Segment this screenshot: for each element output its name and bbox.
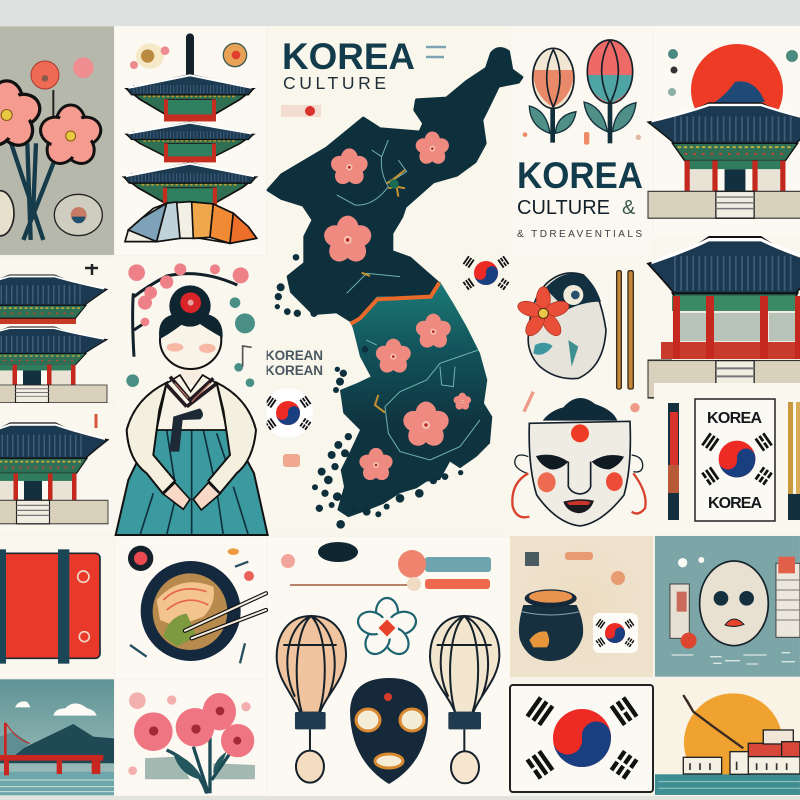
upper tier: [0, 275, 107, 324]
mask with flower: [516, 273, 606, 379]
branch: [683, 695, 743, 748]
lantern right: [430, 616, 499, 783]
spire: [178, 37, 202, 74]
south of peninsula: [337, 282, 492, 517]
panel: Korea card: [654, 383, 800, 535]
stems and leaves: [167, 737, 230, 793]
heading: Korea Culture: CULTURE: [517, 197, 610, 219]
label: Korean: [265, 348, 323, 378]
heading: Korea Culture: &: [622, 197, 636, 219]
panel: red suitcase: [0, 537, 114, 678]
faded red notes: [565, 552, 625, 585]
brush line: [290, 584, 420, 586]
left sleeve: [127, 383, 175, 493]
chopsticks: [617, 271, 633, 389]
blue scribble: [426, 47, 446, 57]
buildings: [670, 557, 800, 638]
tulip right: [584, 40, 636, 143]
panel: masks and chopsticks: [510, 255, 653, 536]
top strip: [0, 0, 800, 26]
coral marks: [523, 132, 641, 145]
pagoda tier 2: [127, 122, 253, 162]
red railing: [661, 342, 800, 359]
card flag: [701, 433, 773, 485]
panel: pavilion lower left: [0, 403, 114, 535]
panel: two-tier pavilion top left: [0, 257, 114, 403]
bowl: [141, 561, 241, 661]
lantern left: [277, 616, 346, 783]
islands: [275, 254, 463, 529]
pink ball: [73, 57, 94, 78]
hair flower: [180, 292, 201, 313]
small red mark: [94, 414, 98, 428]
brush upper: [398, 550, 491, 578]
chopsticks left: [668, 403, 679, 520]
black mask: [350, 678, 428, 784]
white marks: [678, 557, 704, 567]
badges: [78, 571, 89, 642]
panel: pavilion mid right: [648, 236, 800, 398]
small pink note: [283, 454, 300, 467]
tulip left: [529, 48, 576, 143]
pagoda tier 3: [124, 163, 256, 210]
rivers and roads: [337, 140, 480, 460]
water dashes: [672, 653, 795, 664]
panel: pink flowers: [115, 679, 267, 795]
panel: bowl of food: [115, 537, 267, 678]
pagoda tier 1: [127, 75, 253, 121]
card: [695, 399, 775, 521]
red columns: [673, 296, 800, 359]
heading: Korea Culture: & TDREAVENTIALS: [517, 229, 642, 240]
neck: [181, 368, 201, 385]
fan: [125, 202, 257, 243]
heading: Korea Culture: [517, 155, 643, 240]
jacket torso: [157, 375, 227, 430]
panel: tulips and heading: [511, 26, 653, 255]
pink mark: [281, 554, 295, 568]
rocks: [145, 757, 255, 779]
houses: [683, 730, 800, 774]
panel: pagoda: [115, 26, 266, 255]
head: [160, 311, 221, 369]
flag sticker left of map: [263, 388, 313, 438]
label: Korean: KOREAN: [265, 363, 323, 378]
clouds: [15, 701, 97, 716]
subtitle: CULTURE: [283, 73, 386, 93]
panel: lanterns and black mask: [268, 537, 510, 796]
hair: [160, 314, 222, 338]
collar: [166, 377, 216, 407]
water: [655, 774, 800, 795]
map of Korea: [268, 49, 522, 529]
panel: jar: [510, 536, 653, 677]
chopsticks right: [788, 402, 800, 520]
round ornament: [54, 194, 102, 236]
small icons: [128, 546, 254, 663]
right sleeve: [208, 383, 256, 493]
lower tier: [0, 327, 107, 403]
panel: Taegukgi flag: [510, 685, 653, 792]
brush lower: [407, 577, 490, 591]
card text bottom: KOREA: [708, 495, 762, 512]
chopsticks on bowl: [185, 593, 266, 638]
panel: woman in hanbok: [115, 257, 268, 536]
flower: left blossom: [0, 81, 44, 152]
small cross icon: [85, 264, 98, 275]
card text top: KOREA: [707, 410, 762, 427]
blossoms on branch: [128, 263, 249, 326]
red pin note: [281, 105, 321, 117]
flower: small red blossom: [31, 61, 59, 89]
flower outline: [355, 598, 419, 659]
black ellipse: [318, 542, 358, 562]
heading: Korea Culture: KOREA: [517, 155, 643, 196]
leaves and note: [126, 297, 255, 387]
blue hill: [712, 81, 765, 104]
flower: right blossom: [37, 105, 104, 169]
sun: [684, 693, 783, 792]
label: Korean: KOREAN: [265, 348, 323, 363]
ornament left: [130, 43, 169, 69]
pavilion: [648, 103, 800, 218]
panel: bridge landscape: [0, 679, 114, 795]
hands: [163, 483, 220, 510]
panel: pavilion with red sun: [648, 26, 800, 236]
traditional mask: [512, 398, 646, 526]
north of peninsula: [268, 49, 522, 320]
ornament right: [223, 43, 247, 67]
coral marks: [524, 392, 640, 412]
panel: map with heading: [263, 26, 522, 535]
flag sticker right of map: [463, 256, 509, 290]
ribbon: [169, 408, 203, 452]
flag sticker: [593, 613, 638, 653]
mountains: [0, 724, 114, 763]
small leaves: [668, 49, 798, 96]
shell ornament: [0, 191, 14, 236]
mask: [700, 561, 768, 646]
water: [0, 772, 114, 795]
jar: [519, 589, 583, 661]
noodles: [153, 573, 227, 650]
red flower: [681, 633, 697, 649]
wall with mesh screens: [672, 296, 800, 360]
skirt pleats: [140, 430, 248, 535]
red flower: [516, 287, 571, 339]
red bridge: [0, 723, 103, 775]
panel: sunset harbour: [655, 678, 800, 795]
branch: [133, 274, 237, 357]
blossoms on map: [321, 132, 472, 483]
border line: [351, 283, 439, 324]
panel: mask with skyline: [655, 536, 800, 677]
skirt: [116, 428, 268, 535]
blossoms: [134, 693, 254, 757]
panel: cherry blossoms on grey: [0, 26, 114, 255]
red sun: [691, 44, 783, 136]
straps: [0, 549, 69, 664]
bottom strip: [0, 796, 800, 800]
cheeks: [167, 343, 216, 353]
title: KOREA: [282, 35, 415, 77]
